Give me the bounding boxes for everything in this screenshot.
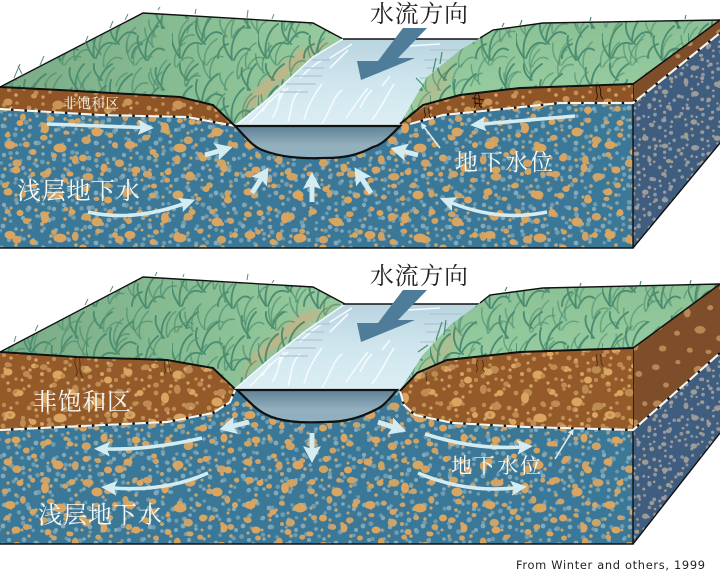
unsaturated zone, right bank (400, 348, 633, 430)
label: shallow groundwater: 浅层地下水 (38, 502, 162, 529)
grass surface, left bank (0, 272, 345, 389)
diagram: lower block, losing stream (0, 263, 720, 544)
stream flow arrow (357, 290, 427, 342)
front face: shallow groundwater (0, 348, 633, 544)
unsaturated zone, left bank (0, 352, 235, 430)
grass surface, right bank (400, 15, 720, 124)
grass surface, right bank (400, 280, 720, 391)
front face: shallow groundwater (0, 84, 633, 248)
label: water table: 地下水位 (455, 150, 553, 175)
unsaturated zone, right bank (400, 84, 633, 124)
water table pointer (555, 433, 571, 459)
grass surface, left bank (0, 7, 343, 126)
label: unsaturated zone: 非饱和区 (63, 96, 119, 111)
groundwater flow arrows (107, 422, 520, 489)
label: stream flow direction: 水流方向 (370, 263, 468, 290)
unsaturated zone, left bank (0, 87, 235, 126)
river surface (235, 39, 480, 126)
label: stream flow direction: 水流方向 (370, 1, 468, 28)
side face: soil and groundwater (633, 20, 720, 248)
water table lines (0, 353, 720, 430)
diagram: upper block, gaining stream (0, 1, 720, 248)
side face: soil and groundwater (633, 284, 720, 544)
label: water table: 地下水位 (451, 454, 541, 478)
water table pointer (424, 127, 440, 148)
source credit: From Winter and others, 1999 (516, 558, 705, 572)
plant roots (75, 354, 603, 381)
stream flow arrow (357, 28, 427, 80)
groundwater flow arrows (47, 116, 575, 216)
plant roots (424, 86, 603, 118)
river surface (235, 304, 480, 390)
stream channel cross section (235, 126, 400, 158)
stream channel cross section (237, 390, 397, 422)
label: unsaturated zone: 非饱和区 (33, 389, 131, 416)
label: shallow groundwater: 浅层地下水 (17, 178, 140, 205)
water table lines (0, 33, 720, 126)
